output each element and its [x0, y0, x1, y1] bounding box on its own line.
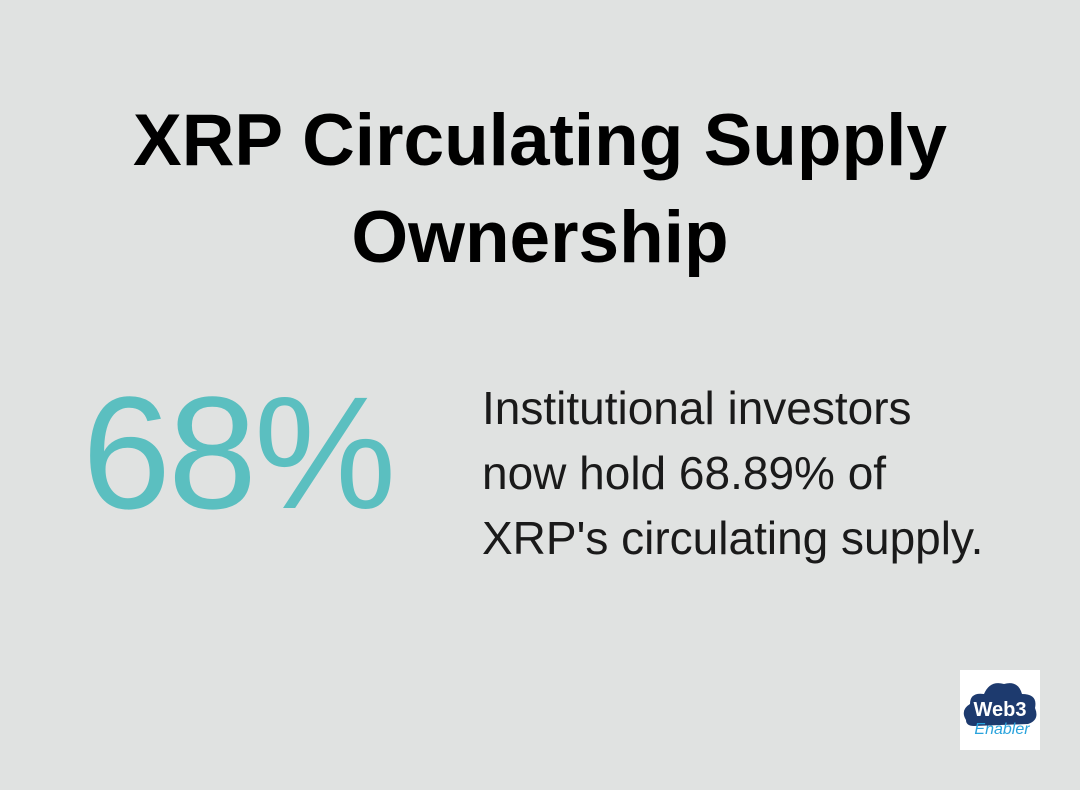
big stat: 68%	[82, 363, 393, 542]
title	[133, 100, 947, 278]
title: XRP Circulating Supply	[133, 100, 947, 181]
logo: Web3 Enabler: Web3	[974, 699, 1026, 721]
logo: Web3 Enabler: Enabler	[974, 721, 1030, 738]
title: Ownership	[351, 197, 729, 278]
description text: XRP's circulating supply.	[482, 512, 983, 564]
logo: Web3 Enabler	[960, 670, 1040, 750]
description text: now hold 68.89% of	[482, 447, 886, 499]
description text	[482, 382, 983, 564]
description text: Institutional investors	[482, 382, 912, 434]
